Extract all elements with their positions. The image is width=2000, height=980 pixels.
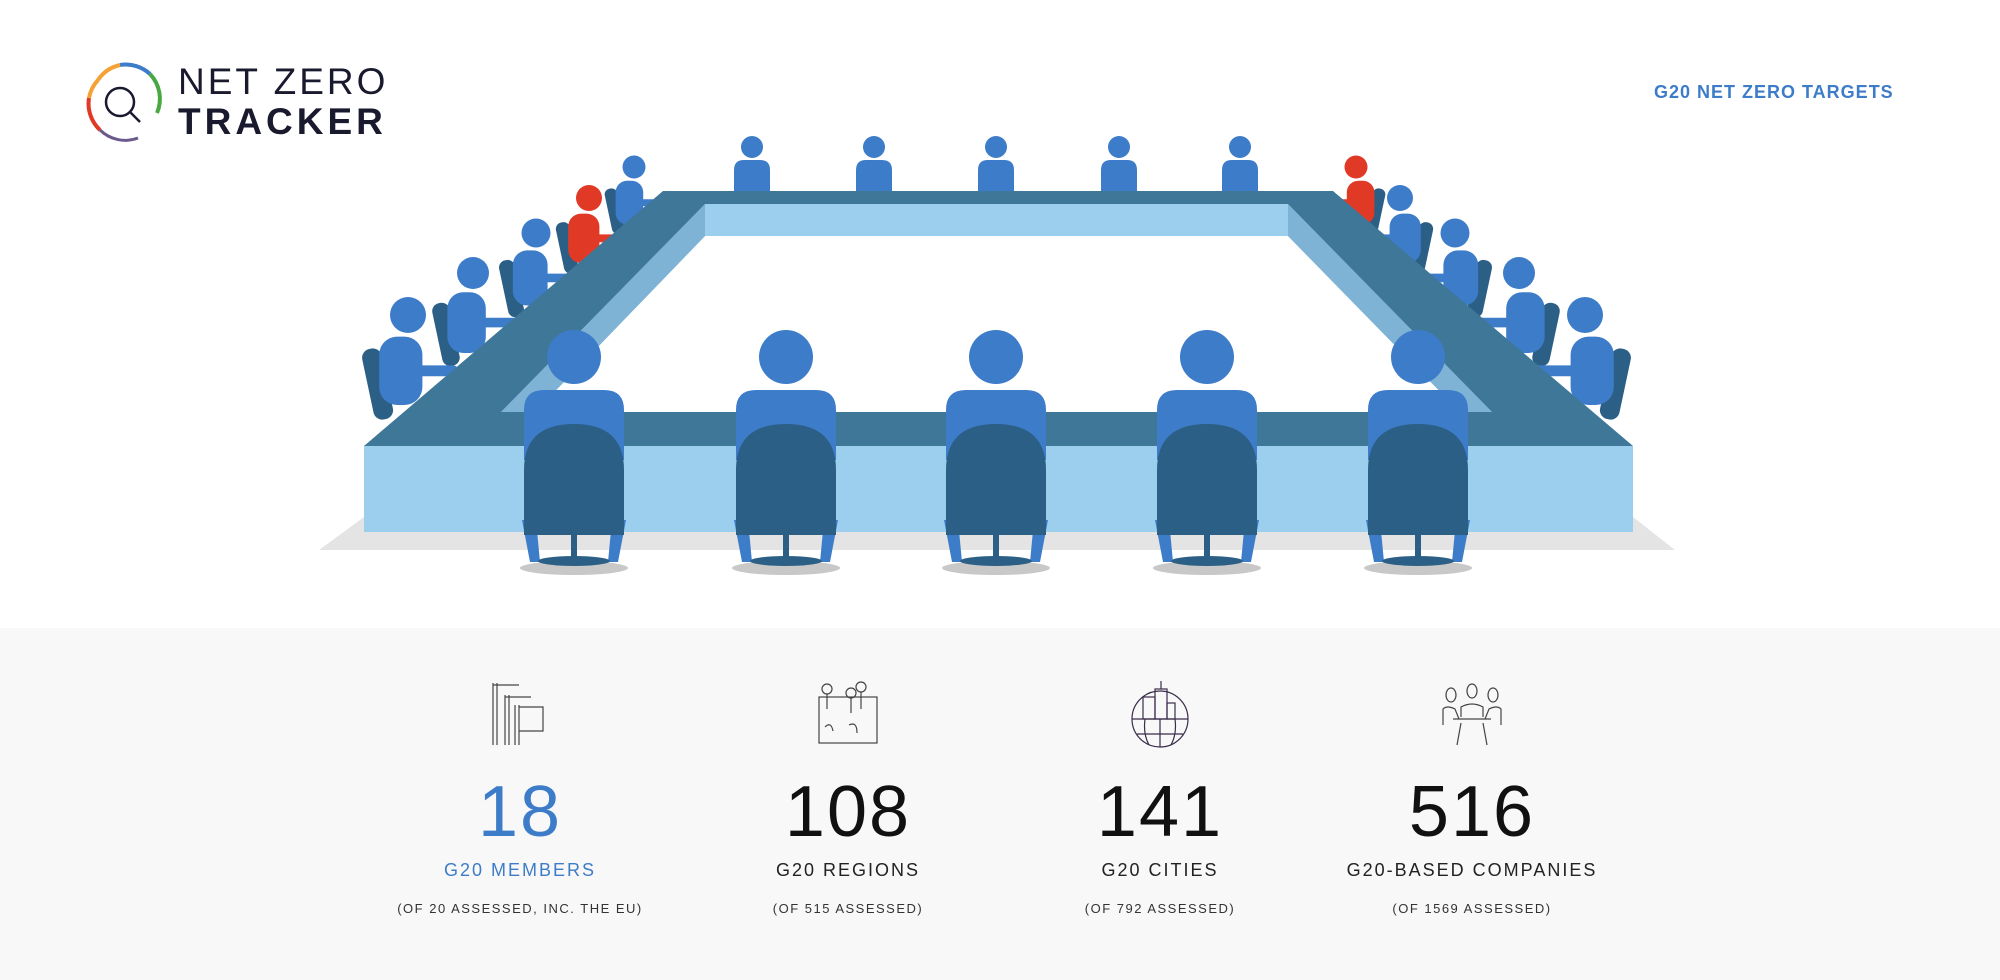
stat: G20 companies	[1347, 683, 1597, 916]
floor shadow	[319, 517, 1675, 550]
logo	[86, 61, 388, 142]
logo text: TRACKER	[178, 101, 387, 142]
stats panel	[0, 628, 2000, 980]
icon: logo ring	[86, 62, 162, 142]
icon: globe city	[1131, 681, 1189, 748]
icon: map	[818, 681, 878, 744]
illustration: table scene	[319, 136, 1675, 575]
stat: G20 members: 18	[478, 772, 562, 852]
right side people	[1324, 156, 1633, 421]
header: G20 NET ZERO TARGETS: G20 NET ZERO TARGETS	[1654, 82, 1894, 102]
stat: G20 cities: (OF 792 ASSESSED)	[1085, 901, 1235, 916]
stat: G20 regions: G20 REGIONS	[776, 860, 920, 880]
table	[364, 191, 1633, 532]
stat: G20 companies: (OF 1569 ASSESSED)	[1392, 901, 1552, 916]
stat: G20 cities: 141	[1097, 772, 1223, 852]
logo text	[178, 61, 388, 142]
stat: G20 regions: (OF 515 ASSESSED)	[773, 901, 923, 916]
stat: G20 companies: G20-BASED COMPANIES	[1347, 860, 1597, 880]
stat: G20 cities	[1085, 681, 1235, 916]
stat: G20 members: G20 MEMBERS	[444, 860, 596, 880]
stat: G20 cities: G20 CITIES	[1101, 860, 1219, 880]
icon: flags	[492, 683, 544, 745]
left side people	[360, 156, 666, 421]
logo text: NET ZERO	[178, 61, 388, 102]
stat: G20 members	[397, 683, 643, 916]
back row people	[734, 136, 1258, 195]
stat: G20 companies: 516	[1409, 772, 1535, 852]
stat: G20 regions	[773, 681, 923, 916]
front row people	[520, 330, 1472, 575]
icon: meeting	[1442, 683, 1502, 746]
stat: G20 regions: 108	[785, 772, 911, 852]
stat: G20 members: (OF 20 ASSESSED, INC. THE EU)	[397, 901, 643, 916]
